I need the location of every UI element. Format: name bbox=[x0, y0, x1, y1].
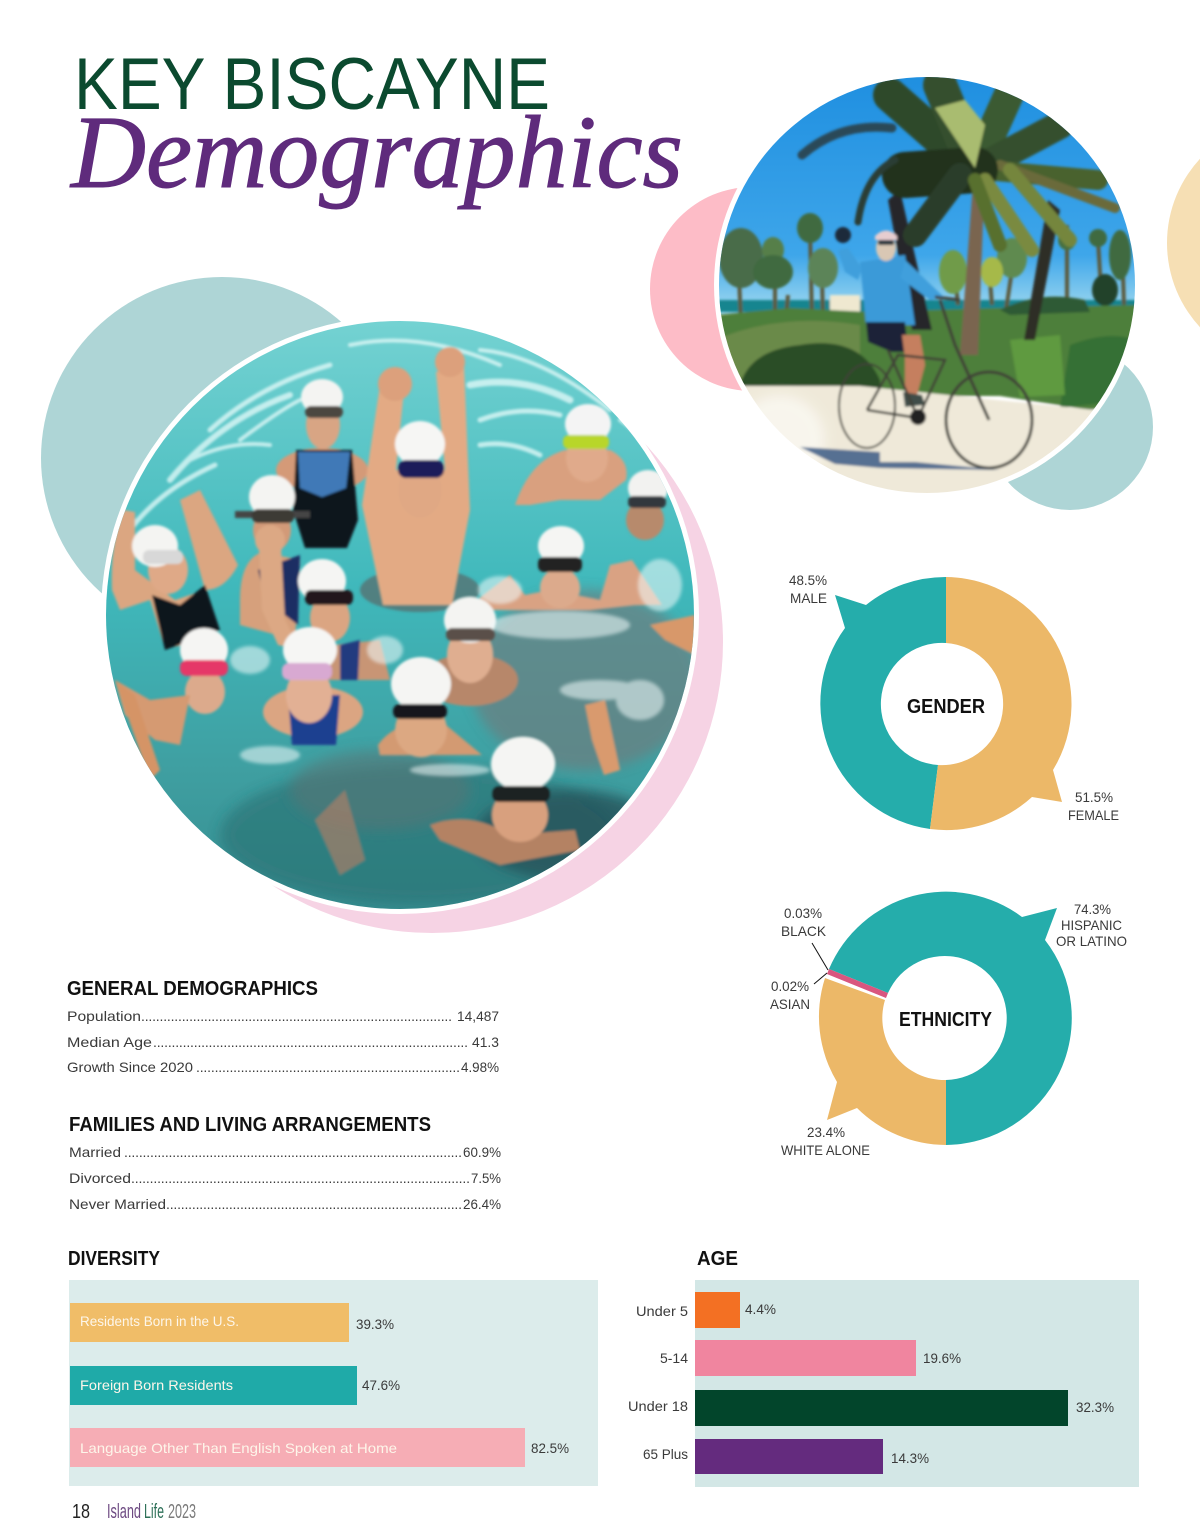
label: asian value: 0.02% bbox=[771, 978, 809, 994]
page number: 18 bbox=[72, 1501, 90, 1523]
bar: 5-14: 5-14 bbox=[660, 1350, 688, 1366]
shadow bbox=[800, 447, 1000, 470]
bar: 65 plus: 65 Plus bbox=[643, 1446, 688, 1462]
publication name bbox=[107, 1501, 196, 1523]
white hut bbox=[830, 295, 860, 315]
label: hispanic value: OR LATINO bbox=[1056, 933, 1127, 949]
row: married: Married bbox=[69, 1144, 121, 1160]
bar: residents born in the U.S. bbox=[70, 1303, 394, 1342]
bar: 5-14: 19.6% bbox=[923, 1350, 961, 1366]
swimmer: boy with green goggles bbox=[515, 450, 627, 505]
slice: hispanic or latino bbox=[829, 892, 1072, 1145]
bar: 5-14 bbox=[660, 1340, 961, 1376]
foam bbox=[230, 559, 682, 776]
bar chart: diversity bbox=[69, 1280, 598, 1486]
swimmer: boy centre bbox=[436, 656, 520, 708]
publication name: Island bbox=[107, 1501, 141, 1523]
label: asian value: ASIAN bbox=[770, 996, 810, 1012]
ethnicity donut chart bbox=[770, 892, 1127, 1158]
swimmer: boy at bottom bbox=[430, 819, 580, 865]
row: growth bbox=[67, 1059, 499, 1075]
row: married: ........................................................................................... bbox=[124, 1144, 462, 1160]
bar: residents born in the U.S.: 39.3% bbox=[356, 1316, 394, 1332]
decorative circle: teal behind cyclist bbox=[987, 344, 1153, 510]
label: male value bbox=[789, 572, 827, 606]
road bbox=[744, 384, 1094, 493]
label: asian value bbox=[770, 978, 810, 1012]
decorative circle: cream at right edge bbox=[1167, 119, 1200, 367]
row: married: 60.9% bbox=[463, 1144, 501, 1160]
row: growth: 4.98% bbox=[461, 1059, 499, 1075]
man bbox=[860, 255, 915, 325]
big palm fronds bbox=[802, 85, 1115, 250]
label: white value: 23.4% bbox=[807, 1124, 845, 1140]
bar: under 18: 32.3% bbox=[1076, 1399, 1114, 1415]
slice: white alone bbox=[819, 978, 946, 1145]
swimmer: boy arms out bbox=[465, 560, 662, 610]
title: KEY BISCAYNE: KEY BISCAYNE bbox=[74, 44, 550, 125]
label: ETHNICITY: ETHNICITY bbox=[899, 1009, 993, 1031]
bar: under 5: Under 5 bbox=[636, 1303, 688, 1319]
heading: age: AGE bbox=[697, 1248, 738, 1270]
swimmer limbs bbox=[585, 700, 620, 775]
label: female value bbox=[1068, 789, 1119, 823]
bar: under 5: 4.4% bbox=[745, 1301, 776, 1317]
bar: 65 plus: 14.3% bbox=[891, 1450, 929, 1466]
bar: foreign born residents bbox=[70, 1366, 400, 1405]
bar: language other than English: Language Other Than English Spoken at Home bbox=[80, 1440, 397, 1456]
bar: 65 plus bbox=[643, 1439, 929, 1474]
label: hispanic value: HISPANIC bbox=[1061, 917, 1122, 933]
bar: language other than English: 82.5% bbox=[531, 1440, 569, 1456]
decorative circle: pink behind swimmers bbox=[141, 351, 723, 933]
row: never married: ................................................................................ bbox=[166, 1196, 462, 1212]
bar: foreign born residents: 47.6% bbox=[362, 1377, 400, 1393]
label: female value: 51.5% bbox=[1075, 789, 1113, 805]
swimmer: boy far right bbox=[626, 500, 664, 540]
row: divorced: ........................................................................................... bbox=[131, 1170, 470, 1186]
decorative circle: teal behind swimmers bbox=[41, 277, 403, 639]
photo: cyclist with palm trees bbox=[714, 72, 1140, 500]
gender donut chart bbox=[789, 572, 1119, 830]
leader line: black bbox=[812, 943, 828, 970]
dark water lower half bbox=[220, 765, 620, 905]
heading: families: FAMILIES AND LIVING ARRANGEMENTS bbox=[69, 1114, 431, 1136]
swimmer: boy black goggles bbox=[378, 720, 482, 755]
publication name: 2023 bbox=[168, 1501, 196, 1523]
row: divorced: Divorced bbox=[69, 1170, 131, 1186]
bar: under 18 bbox=[628, 1390, 1114, 1426]
row: median age: 41.3 bbox=[472, 1034, 499, 1050]
sea band bbox=[715, 300, 1140, 312]
heading: general demographics: GENERAL DEMOGRAPHICS bbox=[67, 978, 318, 1000]
label: white value bbox=[781, 1124, 870, 1158]
row: growth: ....................................................................... bbox=[196, 1059, 460, 1075]
swimmer: girl blue suit bbox=[263, 686, 363, 738]
bar: under 5 bbox=[636, 1292, 776, 1328]
section: families and living arrangements bbox=[69, 1114, 501, 1212]
row: never married: Never Married bbox=[69, 1196, 166, 1212]
section: general demographics bbox=[67, 978, 499, 1075]
bar: foreign born residents: Foreign Born Residents bbox=[80, 1377, 233, 1393]
bar chart: age bbox=[628, 1280, 1139, 1487]
publication name: Life bbox=[144, 1501, 164, 1523]
slice: female bbox=[930, 577, 1072, 830]
swimmer: girl with red goggles bbox=[258, 549, 288, 648]
label: black value bbox=[781, 905, 827, 939]
heading: diversity: DIVERSITY bbox=[68, 1248, 161, 1270]
bar: language other than English bbox=[70, 1428, 569, 1467]
swimmer: boy with raised arms bbox=[362, 365, 470, 605]
row: median age: ..................................................................................... bbox=[153, 1034, 468, 1050]
label: white value: WHITE ALONE bbox=[781, 1142, 870, 1158]
label: hispanic value: 74.3% bbox=[1074, 901, 1111, 917]
label: male value: MALE bbox=[790, 590, 827, 606]
bicycle bbox=[839, 297, 1032, 468]
slice: male bbox=[820, 577, 946, 829]
page footer bbox=[72, 1501, 196, 1523]
dunes bbox=[715, 305, 1140, 410]
label: GENDER: GENDER bbox=[907, 696, 985, 718]
row: never married: 26.4% bbox=[463, 1196, 501, 1212]
bar: residents born in the U.S.: Residents Born in the U.S. bbox=[80, 1313, 239, 1329]
swimmer: girl with dark goggles bbox=[240, 552, 300, 640]
row: never married bbox=[69, 1196, 501, 1212]
big palm trunks bbox=[888, 190, 932, 330]
swimmer: girl pink goggles bbox=[185, 670, 225, 714]
row: divorced: 7.5% bbox=[471, 1170, 501, 1186]
bar: under 18: Under 18 bbox=[628, 1398, 688, 1414]
label: black value: 0.03% bbox=[784, 905, 822, 921]
decorative circle: pink behind cyclist bbox=[650, 187, 854, 391]
slice: black bbox=[827, 969, 888, 998]
row: population: Population bbox=[67, 1008, 141, 1024]
leader line: asian bbox=[814, 973, 827, 984]
swimmer: left girl bbox=[112, 490, 238, 648]
row: median age: Median Age bbox=[67, 1034, 152, 1050]
swimmer: top girl bbox=[276, 448, 368, 492]
label: male value: 48.5% bbox=[789, 572, 827, 588]
label: female value: FEMALE bbox=[1068, 807, 1119, 823]
title: Demographics: Demographics bbox=[69, 95, 683, 210]
label: black value: BLACK bbox=[781, 923, 827, 939]
row: population: .................................................................................... bbox=[141, 1008, 452, 1024]
photo: swimmers in pool bbox=[100, 316, 700, 920]
label: hispanic value bbox=[1056, 901, 1127, 949]
row: population: 14,487 bbox=[457, 1008, 499, 1024]
background palms bbox=[738, 225, 1124, 322]
row: growth: Growth Since 2020 bbox=[67, 1059, 193, 1075]
